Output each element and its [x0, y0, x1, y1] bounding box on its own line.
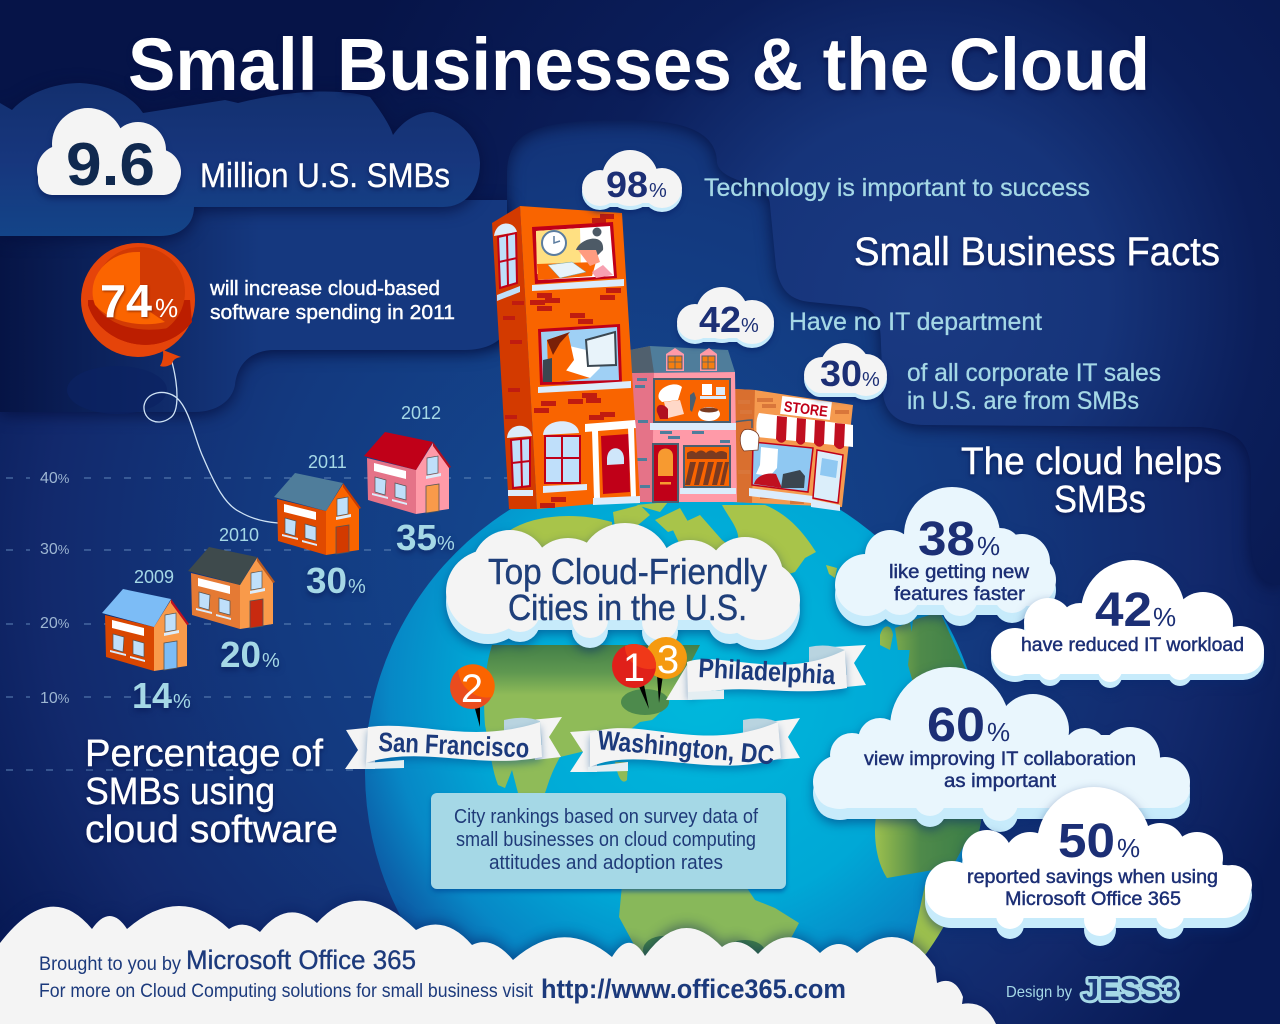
cloud stat 50%	[925, 787, 1252, 936]
map: arctic islands	[613, 503, 726, 550]
pin 3: 3	[657, 638, 679, 682]
cloud stat 50%: Microsoft Office 365	[1005, 889, 1181, 910]
footer text: Brought to you by	[39, 954, 181, 975]
stat 98%: 98	[606, 164, 648, 205]
pin 2	[450, 664, 495, 727]
ribbon: Philadelphia	[666, 645, 866, 700]
cloud stat 38%: %	[977, 531, 1000, 561]
bakery door	[653, 444, 678, 502]
map: florida	[615, 762, 628, 782]
map: south america	[619, 889, 799, 956]
pin 3	[645, 637, 687, 703]
big number 9.6: 9.6	[66, 131, 155, 198]
pin 1	[612, 644, 656, 709]
heading: percentage of SMBs: Percentage of	[85, 733, 323, 775]
stat 30% corporate sales: 30	[820, 353, 862, 394]
house 2011	[274, 473, 361, 555]
bakery shelf window	[680, 446, 736, 494]
bakery window with chef	[654, 379, 730, 422]
rankings note: attitudes and adoption rates	[489, 852, 723, 874]
office window: man at computer	[538, 324, 622, 385]
cloud stat 60%: as important	[944, 771, 1057, 792]
store hanging bread sign	[734, 420, 759, 451]
cloud: cities	[446, 523, 800, 640]
rankings note: City rankings based on survey data of	[454, 806, 758, 828]
chart year labels: 2010	[219, 525, 259, 545]
text: corporate sales	[907, 359, 1161, 415]
doorway	[585, 420, 640, 505]
map: africa	[875, 819, 982, 878]
footer text: Microsoft Office 365	[186, 945, 416, 975]
heading: percentage of SMBs	[85, 733, 338, 851]
balloon 74%: %	[155, 293, 178, 323]
stat 30% corporate sales	[804, 343, 887, 396]
ribbon: Washington DC	[570, 718, 800, 772]
bricks	[503, 214, 621, 508]
map: canada west	[510, 516, 612, 548]
chart year labels	[134, 403, 441, 587]
chart: percentage grid lines	[6, 478, 520, 770]
text: no IT department: Have no IT department	[789, 308, 1042, 336]
stat 98%	[582, 150, 682, 208]
chart values: 30	[306, 560, 347, 601]
stat 30% corporate sales: %	[862, 369, 880, 391]
heading: million SMBs: Million U.S. SMBs	[200, 157, 450, 195]
globe	[365, 494, 982, 960]
cloud stat 42%: have reduced IT workload	[1021, 635, 1244, 656]
chart values: 35	[396, 517, 437, 558]
cloud stat 60%: 60	[927, 699, 985, 752]
rankings note	[431, 793, 786, 889]
chart values: %	[437, 533, 455, 555]
chart axis labels: 30%	[40, 541, 70, 558]
heading: percentage of SMBs: cloud software	[85, 809, 338, 851]
chart values	[132, 517, 455, 716]
title: Small Businesses & the Cloud	[128, 23, 1150, 106]
map: greenland tip	[826, 565, 837, 578]
ribbon: San Francisco	[345, 717, 562, 769]
balloon shadow	[67, 366, 167, 414]
heading: cities	[488, 551, 767, 628]
store awning	[756, 413, 853, 449]
tall orange building	[492, 206, 640, 509]
percent 74: 74	[100, 275, 152, 327]
house 2009	[102, 589, 189, 671]
house 2012	[364, 432, 451, 514]
bakery roof windows	[666, 348, 717, 371]
heading: the cloud helps: The cloud helps	[961, 441, 1222, 483]
footer cloud	[0, 901, 996, 1024]
text: cloud spending	[209, 278, 455, 324]
cloud stat 42%: %	[1153, 602, 1176, 632]
stat 98%: %	[649, 180, 667, 202]
cloud stat 50%: 50	[1058, 815, 1115, 868]
bakery sill	[650, 423, 736, 430]
chart year labels: 2012	[401, 403, 441, 423]
footer text: http://www.office365.com	[541, 974, 846, 1004]
cloud stat 60%: %	[987, 717, 1010, 747]
cloud stat 42%	[991, 560, 1264, 682]
pin 2: 2	[461, 667, 483, 711]
chart values: 14	[132, 675, 172, 716]
balloon 74%	[81, 243, 195, 367]
chart year labels: 2009	[134, 567, 174, 587]
heading: the cloud helps: SMBs	[1054, 479, 1146, 521]
text: technology: Technology is important to success	[704, 174, 1090, 202]
heading: cities: Cities in the U.S.	[508, 587, 747, 628]
cloud stat 60%: view improving IT collaboration	[864, 749, 1136, 770]
bakery building	[630, 346, 737, 502]
text: cloud spending: software spending in 2011	[210, 302, 455, 324]
chart values: %	[348, 576, 366, 598]
text: corporate sales: in U.S. are from SMBs	[907, 387, 1139, 415]
map: europe	[880, 615, 966, 680]
heading: percentage of SMBs: SMBs using	[85, 771, 275, 813]
cloud: 9.6 million	[37, 108, 181, 198]
city label: Washington, DC	[596, 725, 775, 770]
text: cloud spending: will increase cloud-based	[209, 278, 440, 300]
footer text	[39, 945, 846, 1004]
cloud stat 38%	[835, 487, 1056, 616]
panel: small business facts backdrop	[0, 0, 1280, 585]
map: north america	[484, 645, 700, 793]
text: corporate sales: of all corporate IT sales	[907, 359, 1161, 387]
pin 1: 1	[623, 646, 645, 690]
store sign: STORE	[783, 398, 829, 421]
store building	[733, 389, 853, 511]
heading: cities: Top Cloud-Friendly	[488, 551, 767, 592]
chart values: 20	[220, 634, 261, 675]
stat 42% no IT	[677, 287, 774, 344]
chart axis labels: 40%	[40, 470, 70, 487]
house 2010	[188, 547, 275, 629]
chart axis labels	[40, 470, 70, 707]
panel: cloud-based spending backdrop	[0, 200, 507, 412]
heading: the cloud helps	[961, 441, 1222, 521]
cloud stat 38%: like getting new	[889, 562, 1029, 583]
office window: woman reading	[532, 222, 617, 284]
cloud stat 42%: 42	[1095, 584, 1152, 637]
rankings note: small businesses on cloud computing	[456, 829, 756, 851]
chart axis labels: 10%	[40, 690, 70, 707]
panel: million SMBs backdrop	[0, 83, 480, 236]
chart values: %	[262, 650, 280, 672]
store window	[752, 442, 813, 492]
chart axis labels: 20%	[40, 615, 70, 632]
stat 42% no IT: %	[741, 315, 759, 337]
JESS3 logo: JESS3	[1082, 972, 1178, 1007]
city label: Philadelphia	[698, 653, 837, 690]
heading: small business facts: Small Business Facts	[854, 230, 1220, 274]
balloon string	[144, 362, 278, 523]
side windows	[494, 223, 533, 496]
cloud stat 38%: features faster	[894, 584, 1026, 605]
store door	[813, 450, 843, 503]
city label: San Francisco	[378, 727, 530, 764]
design credit: Design by	[1006, 984, 1072, 1001]
stat 42% no IT: 42	[699, 299, 741, 340]
cloud stat 38%: 38	[918, 513, 975, 566]
map: canada east	[722, 505, 816, 580]
footer text: For more on Cloud Computing solutions for small business visit	[39, 981, 534, 1002]
cloud stat 50%: reported savings when using	[967, 867, 1218, 888]
cloud stat 50%: %	[1117, 833, 1140, 863]
cloud stat 60%	[813, 667, 1190, 821]
ground floor window	[543, 421, 587, 493]
chart values: %	[173, 691, 191, 713]
chart year labels: 2011	[308, 452, 347, 472]
